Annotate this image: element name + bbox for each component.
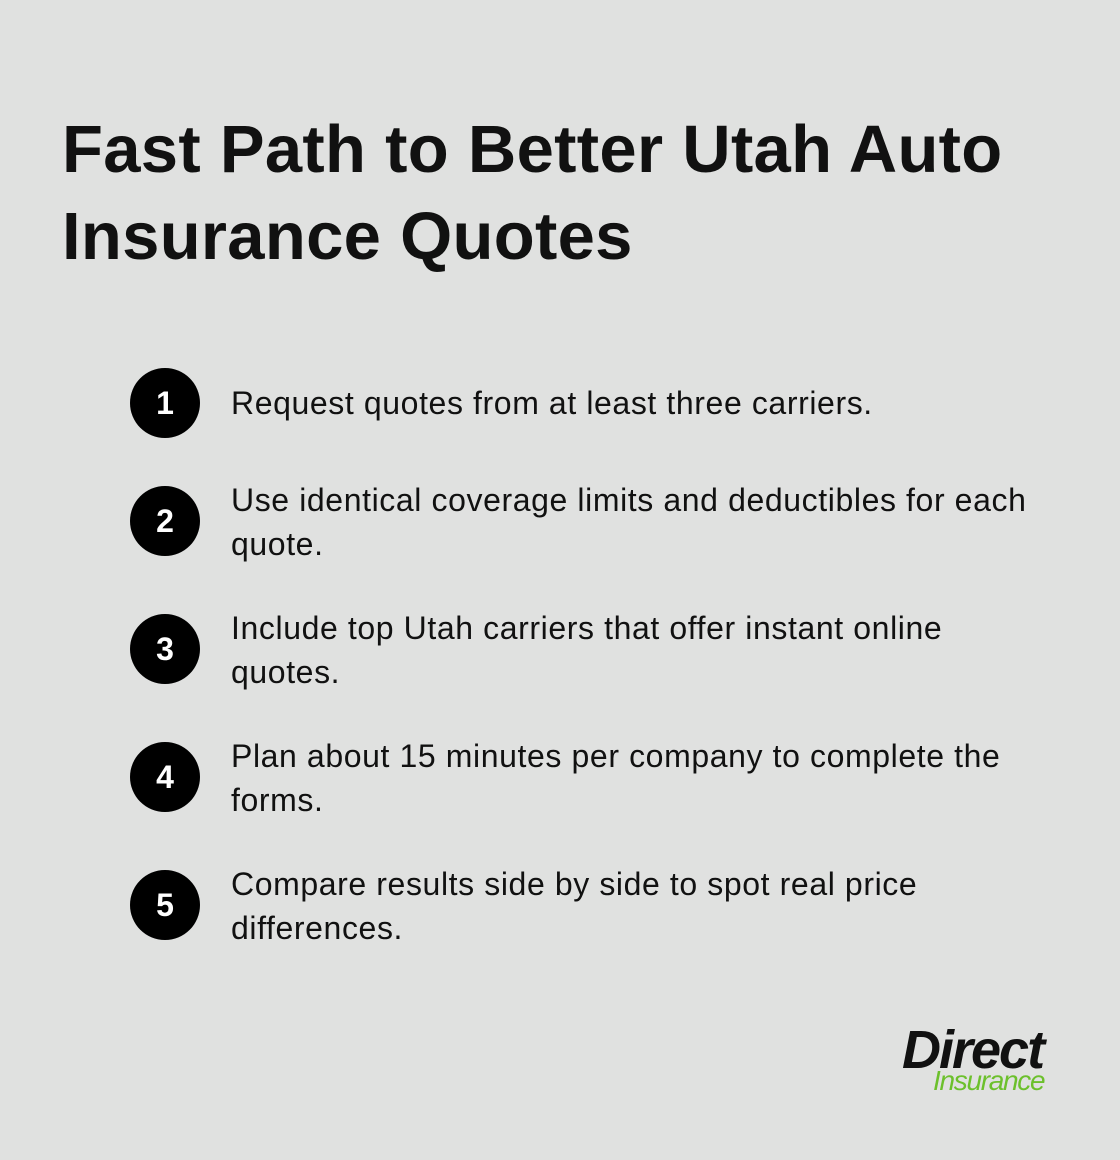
step 4: 4 bbox=[156, 759, 174, 795]
step 1: 1 bbox=[156, 385, 174, 421]
step 3: 3 bbox=[156, 631, 174, 667]
logo: Direct bbox=[902, 1020, 1043, 1080]
step 5: 5 bbox=[156, 887, 174, 923]
step 2: Use identical coverage limits and deductibles for each quote. bbox=[231, 482, 1026, 562]
title: Fast Path to Better Utah Auto Insurance Quotes bbox=[62, 112, 1003, 274]
step 1: Request quotes from at least three carriers. bbox=[231, 385, 873, 421]
step 3: Include top Utah carriers that offer instant online quotes. bbox=[231, 610, 942, 690]
step 2: 2 bbox=[156, 503, 174, 539]
logo: Insurance bbox=[933, 1065, 1044, 1096]
step 1 bbox=[130, 368, 873, 438]
step 4: Plan about 15 minutes per company to complete the forms. bbox=[231, 738, 1000, 818]
step 5: Compare results side by side to spot real price differences. bbox=[231, 866, 917, 946]
